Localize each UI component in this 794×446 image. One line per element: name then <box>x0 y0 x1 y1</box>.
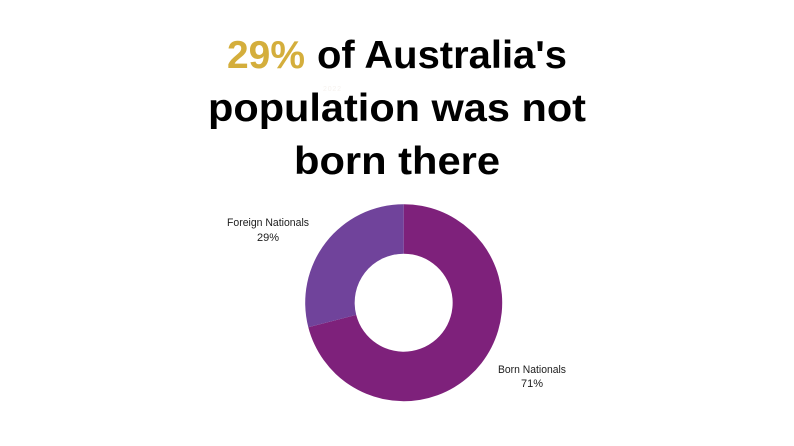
label: born nationals <box>498 364 566 390</box>
label: born nationals: Born Nationals <box>498 364 566 376</box>
title line 3: born there <box>294 140 500 183</box>
title line 1: of Australia's <box>317 34 567 77</box>
segment: born nationals 71% <box>308 204 502 401</box>
title line 2: population was not <box>208 87 586 130</box>
segment: foreign nationals 29% <box>305 204 404 327</box>
label: foreign nationals: 29% <box>257 232 279 244</box>
title highlight: 29%: 29% <box>227 34 305 77</box>
donut chart <box>305 204 502 401</box>
label: foreign nationals: Foreign Nationals <box>227 217 309 229</box>
label: born nationals: 71% <box>521 378 543 390</box>
title <box>208 34 586 183</box>
label: foreign nationals <box>227 217 309 244</box>
faint year mark: 2022 <box>323 86 341 93</box>
